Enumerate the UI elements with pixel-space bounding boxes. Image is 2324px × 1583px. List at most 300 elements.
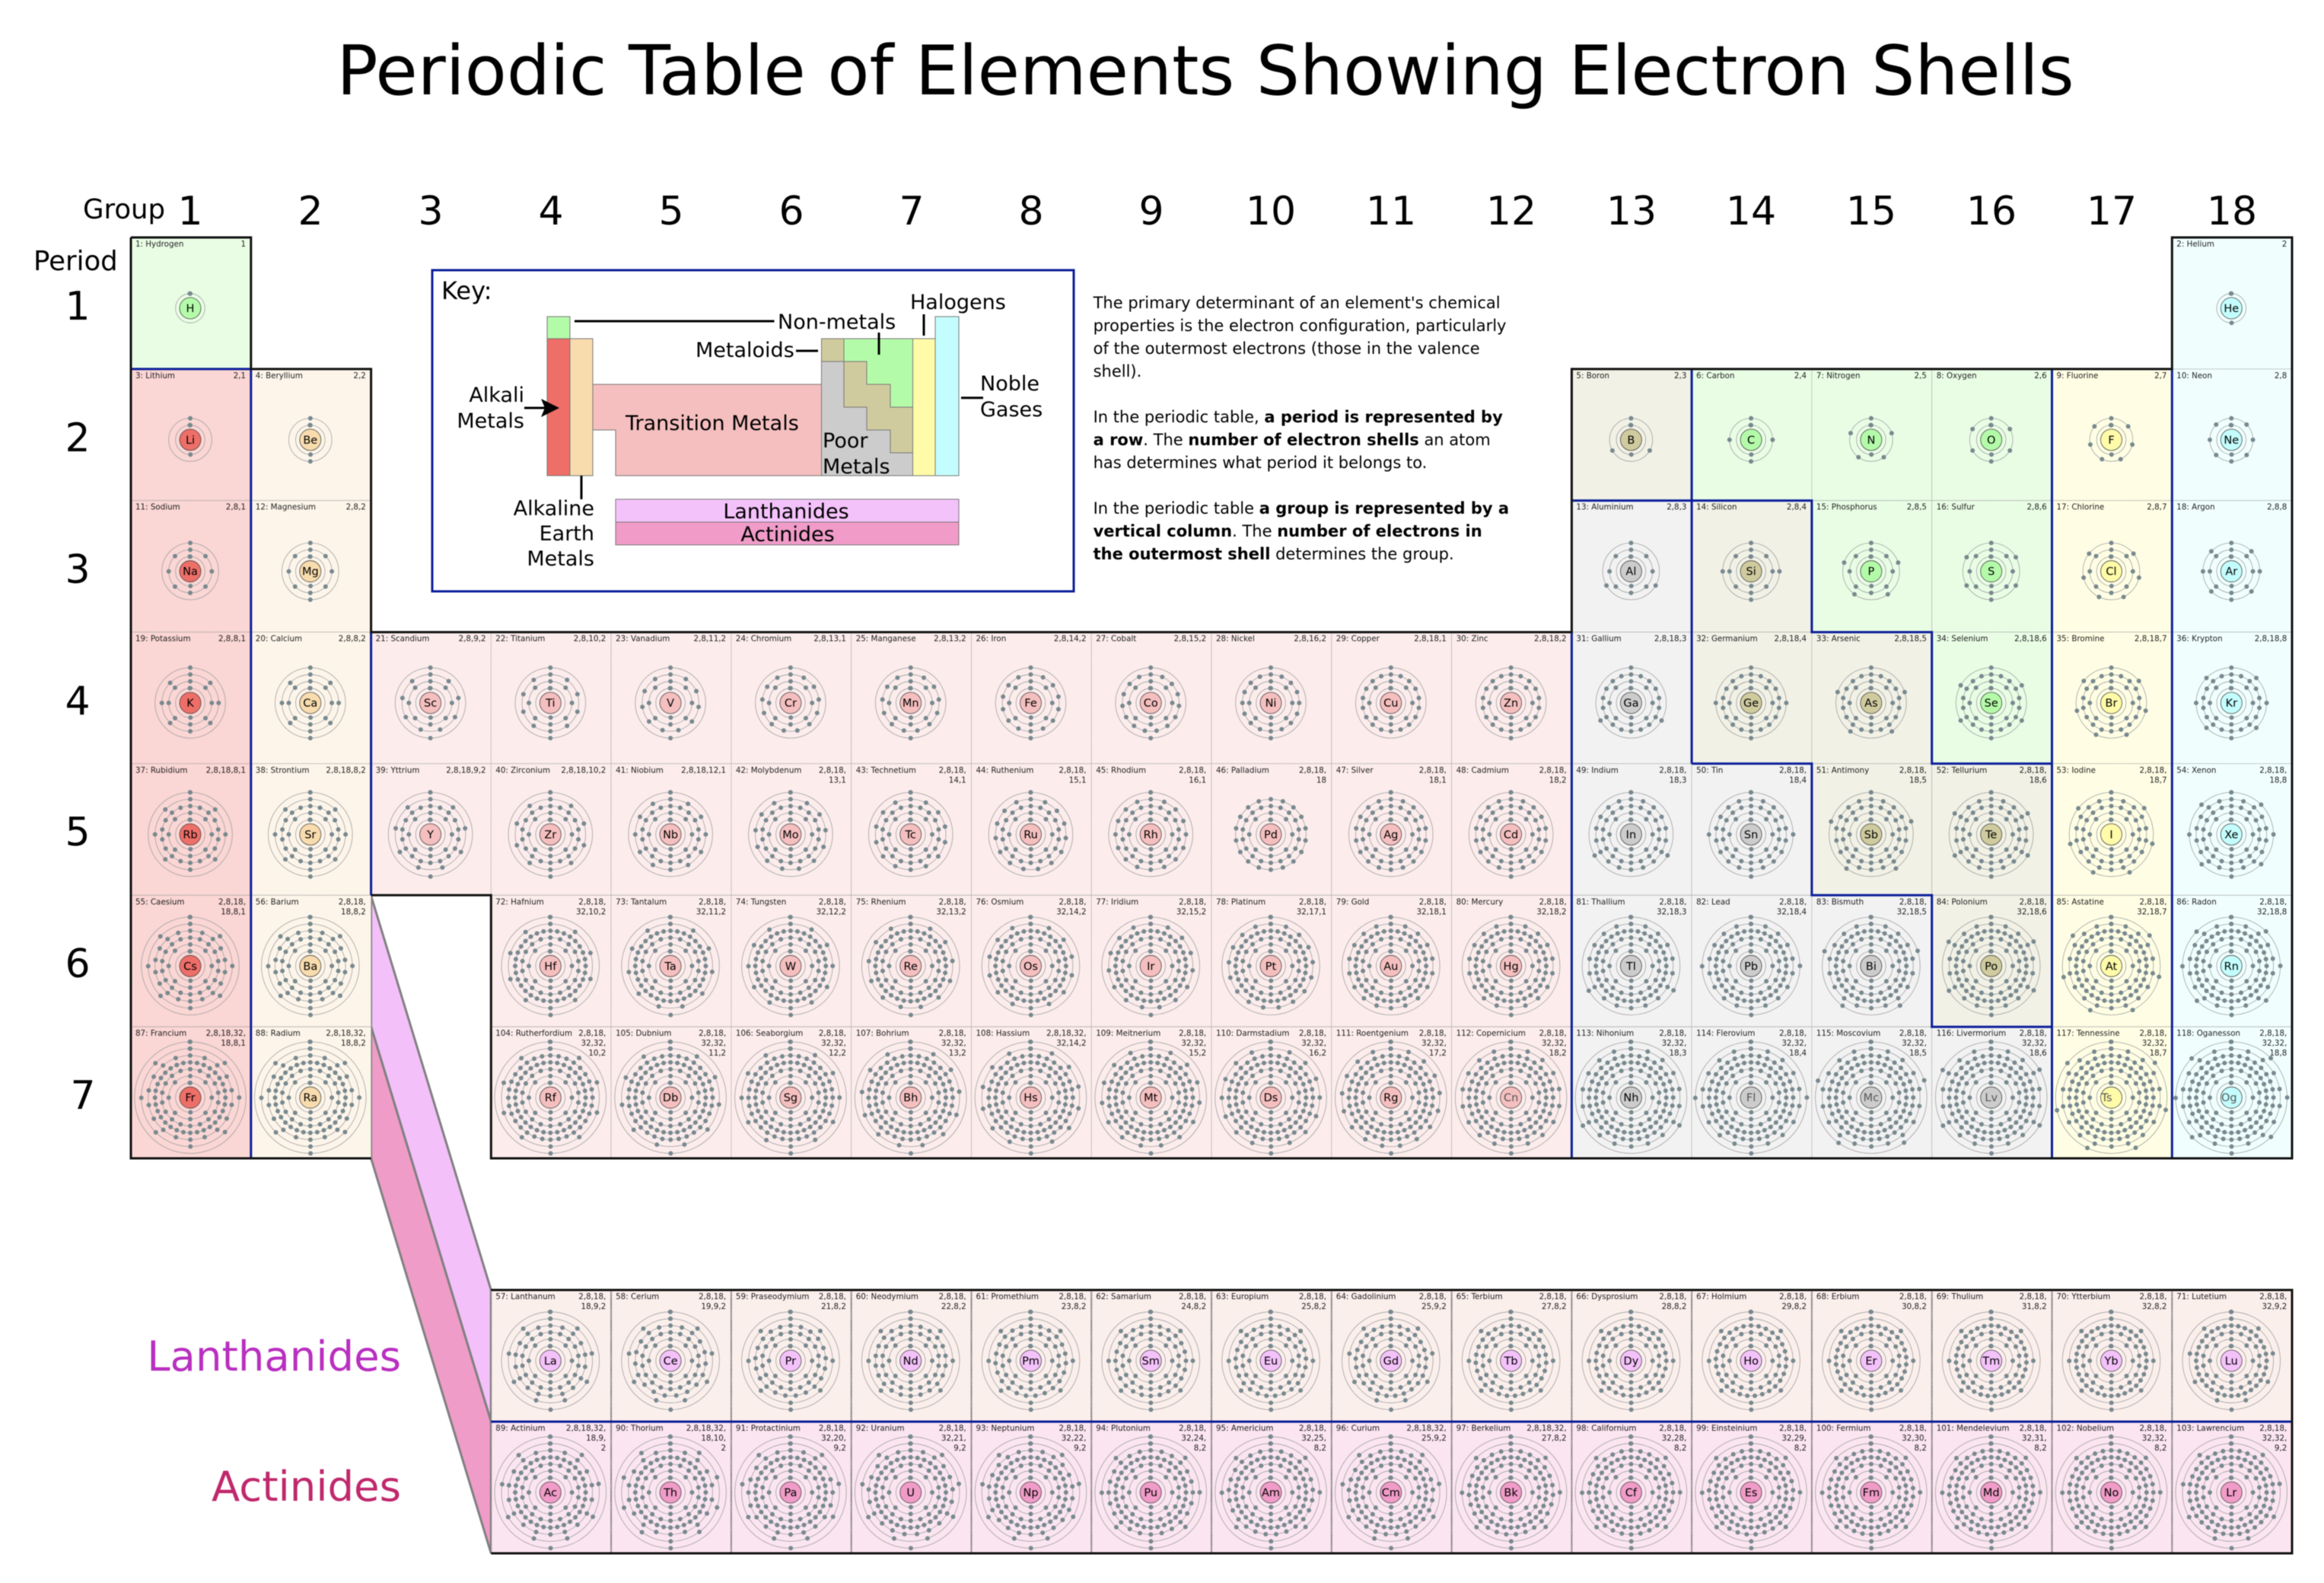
- Fermium: [1812, 1422, 1932, 1553]
- Krypton: Kr: [2226, 698, 2237, 710]
- Roentgenium: [1332, 1027, 1452, 1158]
- Sulfur: 16: Sulfur: [1937, 503, 1975, 512]
- Silver: 47: Silver: [1336, 766, 1374, 775]
- Radon: 2,8,18,: [2259, 897, 2287, 906]
- Terbium: 27,8,2: [1542, 1302, 1567, 1311]
- Samarium: 62: Samarium: [1096, 1292, 1151, 1301]
- panel: key: Key:: [441, 276, 492, 305]
- Hassium: 2,8,18,32,: [1046, 1029, 1087, 1038]
- Technetium: 14,1: [949, 776, 966, 785]
- Iridium: [1091, 895, 1211, 1027]
- Oganesson: 18,8: [2269, 1049, 2287, 1058]
- Xenon: [2172, 763, 2292, 895]
- Ruthenium: 44: Ruthenium: [976, 766, 1033, 775]
- Gallium: [1571, 632, 1692, 763]
- Lead: Pb: [1744, 960, 1758, 973]
- Radon: 86: Radon: [2176, 897, 2217, 906]
- key: labels: Lanthanides: [723, 500, 849, 524]
- Palladium: Pd: [1264, 829, 1278, 841]
- table outline: [131, 237, 2292, 1553]
- Terbium: [1452, 1290, 1571, 1422]
- Mendelevium: 8,2: [2034, 1444, 2047, 1453]
- Oganesson: [2172, 1027, 2292, 1158]
- Carbon: 2,4: [1794, 371, 1807, 381]
- Astatine: 2,8,18,: [2139, 897, 2167, 906]
- Titanium: [491, 632, 611, 763]
- key: lanthanides bar: [616, 499, 959, 522]
- Zirconium: 40: Zirconium: [495, 766, 550, 775]
- Seaborgium: Sg: [784, 1092, 797, 1104]
- Zinc: [1452, 632, 1571, 763]
- Iridium: 32,15,2: [1176, 907, 1206, 916]
- key: alkali metals: [547, 339, 570, 476]
- Carbon: C: [1747, 435, 1755, 447]
- Copper: [1332, 632, 1452, 763]
- Samarium: 24,8,2: [1181, 1302, 1206, 1311]
- group numbers: 8: [1018, 189, 1044, 234]
- Protactinium: [731, 1422, 852, 1553]
- Oganesson: 2,8,18,: [2259, 1029, 2287, 1038]
- Holmium: 29,8,2: [1781, 1302, 1807, 1311]
- Cadmium: [1452, 763, 1571, 895]
- Oxygen: 2,6: [2034, 371, 2047, 381]
- Osmium: [971, 895, 1091, 1027]
- Promethium: 23,8,2: [1062, 1302, 1087, 1311]
- Bohrium: 2,8,18,: [939, 1029, 966, 1038]
- Tungsten: W: [785, 960, 796, 973]
- Bromine: 2,8,18,7: [2135, 635, 2167, 644]
- Lutetium: Lu: [2225, 1355, 2238, 1368]
- group numbers: 7: [899, 189, 925, 234]
- Ruthenium: Ru: [1024, 829, 1038, 841]
- Nitrogen: [1812, 369, 1932, 501]
- Hafnium: 32,10,2: [576, 907, 606, 916]
- Cerium: 58: Cerium: [616, 1292, 659, 1301]
- Argon: [2172, 501, 2292, 632]
- Indium: 49: Indium: [1576, 766, 1619, 775]
- Caesium: Cs: [183, 960, 197, 973]
- Protactinium: Pa: [784, 1487, 797, 1499]
- Rhenium: Re: [904, 960, 918, 973]
- Livermorium: [1932, 1027, 2052, 1158]
- Neon: Ne: [2224, 435, 2239, 447]
- Moscovium: 18,5: [1909, 1049, 1927, 1058]
- Nobelium: [2052, 1422, 2172, 1553]
- Hassium: 108: Hassium: [976, 1029, 1030, 1038]
- Radium: 88: Radium: [256, 1029, 301, 1038]
- Darmstadium: 32,32,: [1301, 1039, 1326, 1048]
- Lawrencium: Lr: [2226, 1487, 2236, 1499]
- explanatory text: In the periodic table, a period is represented by: [1094, 408, 1503, 426]
- Rhenium: 2,8,18,: [939, 897, 966, 906]
- group numbers: 14: [1726, 189, 1776, 234]
- Roentgenium: Rg: [1383, 1092, 1398, 1104]
- key: transition metals: [593, 384, 822, 476]
- explanatory text: of the outermost electrons (those in the valence: [1094, 339, 1480, 358]
- Molybdenum: 2,8,18,: [819, 766, 846, 775]
- Niobium: 41: Niobium: [616, 766, 664, 775]
- Bohrium: [852, 1027, 971, 1158]
- Nickel: 2,8,16,2: [1294, 635, 1326, 644]
- Lutetium: 32,9,2: [2262, 1302, 2287, 1311]
- key: labels: Noble: [980, 372, 1039, 396]
- Technetium: [852, 763, 971, 895]
- Lanthanum: 18,9,2: [581, 1302, 606, 1311]
- Americium: 8,2: [1314, 1444, 1326, 1453]
- Lutetium: 71: Lutetium: [2176, 1292, 2227, 1301]
- Gold: [1332, 895, 1452, 1027]
- key: alkaline earth metals: [570, 339, 593, 476]
- Livermorium: 116: Livermorium: [1937, 1029, 2006, 1038]
- Copernicium: 18,2: [1549, 1049, 1567, 1058]
- Nitrogen: N: [1867, 435, 1875, 447]
- Indium: In: [1626, 829, 1636, 841]
- group numbers: 18: [2207, 189, 2257, 234]
- Selenium: 34: Selenium: [1937, 635, 1988, 644]
- Lawrencium: [2172, 1422, 2292, 1553]
- Promethium: [971, 1290, 1091, 1422]
- Bohrium: Bh: [903, 1092, 918, 1104]
- Yttrium: 2,8,18,9,2: [446, 766, 486, 775]
- Uranium: 9,2: [953, 1444, 966, 1453]
- Thorium: 2: [721, 1444, 726, 1453]
- Magnesium: [251, 501, 371, 632]
- Cadmium: 18,2: [1549, 776, 1567, 785]
- Dysprosium: [1571, 1290, 1692, 1422]
- Selenium: [1932, 632, 2052, 763]
- Lead: [1692, 895, 1812, 1027]
- Lawrencium: 32,32,: [2262, 1434, 2287, 1443]
- Erbium: Er: [1865, 1355, 1877, 1368]
- Tennessine: 117: Tennessine: [2056, 1029, 2120, 1038]
- key: labels: Metals: [823, 455, 890, 479]
- Xenon: Xe: [2224, 829, 2238, 841]
- Zinc: Zn: [1504, 698, 1518, 710]
- Meitnerium: [1091, 1027, 1211, 1158]
- Moscovium: [1812, 1027, 1932, 1158]
- Ytterbium: Yb: [2103, 1355, 2119, 1368]
- Iodine: [2052, 763, 2172, 895]
- Fermium: 100: Fermium: [1816, 1424, 1870, 1433]
- Gadolinium: Gd: [1383, 1355, 1399, 1368]
- Uranium: [852, 1422, 971, 1553]
- Samarium: 2,8,18,: [1179, 1292, 1206, 1301]
- Praseodymium: [731, 1290, 852, 1422]
- Polonium: [1932, 895, 2052, 1027]
- Plutonium: 2,8,18,: [1179, 1424, 1206, 1433]
- Radium: 2,8,18,32,: [326, 1029, 366, 1038]
- Platinum: 32,17,1: [1297, 907, 1326, 916]
- Astatine: At: [2106, 960, 2117, 973]
- Silver: Ag: [1383, 829, 1398, 841]
- Berkelium: 2,8,18,32,: [1527, 1424, 1567, 1433]
- lanthanides connector wedge: [371, 896, 491, 1422]
- Dubnium: 32,32,: [701, 1039, 726, 1048]
- Samarium: Sm: [1142, 1355, 1160, 1368]
- Palladium: 46: Palladium: [1216, 766, 1269, 775]
- group numbers: 11: [1366, 189, 1416, 234]
- Polonium: 32,18,6: [2017, 907, 2047, 916]
- Platinum: 2,8,18,: [1299, 897, 1326, 906]
- Francium: Fr: [185, 1092, 196, 1104]
- Berkelium: 97: Berkelium: [1456, 1424, 1511, 1433]
- Francium: [131, 1027, 251, 1158]
- Xenon: 18,8: [2269, 776, 2287, 785]
- Vanadium: V: [667, 698, 674, 710]
- category boundary lines: [131, 369, 2292, 1422]
- Caesium: 55: Caesium: [135, 897, 184, 906]
- Plutonium: Pu: [1144, 1487, 1157, 1499]
- explanatory text: vertical column. The number of electrons in: [1094, 522, 1482, 540]
- Tin: Sn: [1744, 829, 1758, 841]
- Flerovium: 114: Flerovium: [1696, 1029, 1755, 1038]
- Dysprosium: 28,8,2: [1662, 1302, 1686, 1311]
- group numbers: 10: [1246, 189, 1296, 234]
- Thallium: 2,8,18,: [1659, 897, 1686, 906]
- Dubnium: 2,8,18,: [699, 1029, 726, 1038]
- Dysprosium: Dy: [1624, 1355, 1639, 1368]
- Technetium: 43: Technetium: [856, 766, 916, 775]
- Boron: [1571, 369, 1692, 501]
- panel: key: [432, 270, 1074, 591]
- Meitnerium: 32,32,: [1181, 1039, 1206, 1048]
- Iodine: 2,8,18,: [2139, 766, 2167, 775]
- key: metalloid top: [822, 339, 844, 362]
- Mercury: 2,8,18,: [1539, 897, 1567, 906]
- Flerovium: [1692, 1027, 1812, 1158]
- Indium: 18,3: [1669, 776, 1686, 785]
- Iron: 2,8,14,2: [1054, 635, 1087, 644]
- Mendelevium: Md: [1983, 1487, 2000, 1499]
- key: alkali arrow head: [541, 399, 559, 417]
- Gold: Au: [1383, 960, 1398, 973]
- key: labels: Transition Metals: [625, 412, 799, 435]
- Americium: [1211, 1422, 1332, 1553]
- Neodymium: 60: Neodymium: [856, 1292, 918, 1301]
- Potassium: [131, 632, 251, 763]
- Fluorine: F: [2108, 435, 2115, 447]
- Lead: 82: Lead: [1696, 897, 1730, 906]
- Tennessine: 18,7: [2150, 1049, 2167, 1058]
- Lithium: Li: [186, 435, 195, 447]
- Roentgenium: 32,32,: [1421, 1039, 1447, 1048]
- Ytterbium: 2,8,18,: [2139, 1292, 2167, 1301]
- period numbers: [65, 284, 96, 1119]
- Palladium: 2,8,18,: [1299, 766, 1326, 775]
- group numbers: 16: [1966, 189, 2017, 234]
- Iridium: Ir: [1147, 960, 1154, 973]
- Hydrogen: 1: Hydrogen: [135, 240, 183, 249]
- Rhenium: 75: Rhenium: [856, 897, 906, 906]
- Antimony: 18,5: [1909, 776, 1927, 785]
- Cobalt: 27: Cobalt: [1096, 635, 1136, 644]
- Thallium: 32,18,3: [1657, 907, 1686, 916]
- Copper: 2,8,18,1: [1414, 635, 1447, 644]
- Neptunium: Np: [1023, 1487, 1039, 1499]
- Actinium: [491, 1422, 611, 1553]
- Titanium: 2,8,10,2: [574, 635, 606, 644]
- Actinium: 2: [601, 1444, 606, 1453]
- Xenon: 2,8,18,: [2259, 766, 2287, 775]
- Ruthenium: [971, 763, 1091, 895]
- Gadolinium: 64: Gadolinium: [1336, 1292, 1396, 1301]
- Cobalt: [1091, 632, 1211, 763]
- Protactinium: 32,20,: [821, 1434, 846, 1443]
- Erbium: 68: Erbium: [1816, 1292, 1859, 1301]
- Rutherfordium: 104: Rutherfordium: [495, 1029, 572, 1038]
- Ytterbium: [2052, 1290, 2172, 1422]
- Niobium: Nb: [663, 829, 678, 841]
- Roentgenium: 17,2: [1429, 1049, 1447, 1058]
- Seaborgium: 2,8,18,: [819, 1029, 846, 1038]
- Strontium: 2,8,18,8,2: [326, 766, 366, 775]
- Polonium: Po: [1985, 960, 1998, 973]
- Vanadium: 2,8,11,2: [694, 635, 726, 644]
- Moscovium: Mc: [1864, 1092, 1879, 1104]
- Plutonium: 94: Plutonium: [1096, 1424, 1151, 1433]
- Flerovium: 2,8,18,: [1779, 1029, 1807, 1038]
- Sodium: 11: Sodium: [135, 503, 180, 512]
- Radon: 32,18,8: [2257, 907, 2287, 916]
- Rutherfordium: 10,2: [588, 1049, 606, 1058]
- Livermorium: 32,32,: [2022, 1039, 2047, 1048]
- Copper: Cu: [1383, 698, 1398, 710]
- explanatory text: [1093, 294, 1509, 563]
- Thulium: [1932, 1290, 2052, 1422]
- explanatory text: a row. The number of electron shells an atom: [1094, 431, 1491, 449]
- Tantalum: [611, 895, 731, 1027]
- Vanadium: [611, 632, 731, 763]
- key: non-metals: [844, 339, 913, 407]
- Gold: 32,18,1: [1416, 907, 1447, 916]
- Copper: 29: Copper: [1336, 635, 1380, 644]
- Seaborgium: 32,32,: [821, 1039, 846, 1048]
- Uranium: U: [906, 1487, 915, 1499]
- Strontium: Sr: [304, 829, 316, 841]
- Hafnium: [491, 895, 611, 1027]
- period numbers: 3: [65, 547, 91, 593]
- period numbers: 7: [70, 1073, 96, 1119]
- key: labels: Metals: [457, 409, 524, 433]
- Tin: [1692, 763, 1812, 895]
- Bismuth: 83: Bismuth: [1816, 897, 1864, 906]
- Rhodium: [1091, 763, 1211, 895]
- Chlorine: [2052, 501, 2172, 632]
- Zirconium: Zr: [544, 829, 556, 841]
- actinides connector wedge: [371, 1027, 491, 1553]
- Tellurium: Te: [1985, 829, 1997, 841]
- Americium: Am: [1262, 1487, 1280, 1499]
- Germanium: 32: Germanium: [1696, 635, 1758, 644]
- Mendelevium: 32,31,: [2022, 1434, 2047, 1443]
- Holmium: 67: Holmium: [1696, 1292, 1746, 1301]
- Phosphorus: 15: Phosphorus: [1816, 503, 1877, 512]
- Dubnium: Db: [663, 1092, 678, 1104]
- Nihonium: 18,3: [1669, 1049, 1686, 1058]
- Californium: 98: Californium: [1576, 1424, 1636, 1433]
- Krypton: [2172, 632, 2292, 763]
- key: halogens: [913, 339, 935, 476]
- Arsenic: As: [1864, 698, 1878, 710]
- Copernicium: 112: Copernicium: [1456, 1029, 1526, 1038]
- Mendelevium: 101: Mendelevium: [1937, 1424, 2009, 1433]
- Fermium: 2,8,18,: [1899, 1424, 1927, 1433]
- Carbon: 6: Carbon: [1696, 371, 1734, 381]
- Darmstadium: 16,2: [1309, 1049, 1326, 1058]
- Thallium: Tl: [1625, 960, 1636, 973]
- Helium: 2: Helium: [2176, 240, 2214, 249]
- group numbers: 15: [1846, 189, 1896, 234]
- Meitnerium: 2,8,18,: [1179, 1029, 1206, 1038]
- Scandium: Sc: [424, 698, 437, 710]
- Nihonium: Nh: [1623, 1092, 1638, 1104]
- Phosphorus: [1812, 501, 1932, 632]
- Rubidium: 37: Rubidium: [135, 766, 187, 775]
- Ruthenium: 15,1: [1069, 776, 1087, 785]
- Manganese: 2,8,13,2: [934, 635, 966, 644]
- key: leader lines: [524, 314, 983, 499]
- lanthanides and actinides table: [491, 1290, 2292, 1553]
- key: labels: Poor: [823, 429, 868, 453]
- Chromium: 2,8,13,1: [813, 635, 846, 644]
- Seaborgium: [731, 1027, 852, 1158]
- Fermium: 8,2: [1915, 1444, 1927, 1453]
- Erbium: 2,8,18,: [1899, 1292, 1927, 1301]
- Germanium: 2,8,18,4: [1775, 635, 1807, 644]
- Astatine: [2052, 895, 2172, 1027]
- Curium: 2,8,18,32,: [1406, 1424, 1447, 1433]
- Arsenic: 33: Arsenic: [1816, 635, 1861, 644]
- Tin: 50: Tin: [1696, 766, 1723, 775]
- Bohrium: 13,2: [949, 1049, 966, 1058]
- group numbers: [177, 189, 2257, 234]
- Curium: Cm: [1382, 1487, 1400, 1499]
- Hafnium: 72: Hafnium: [495, 897, 544, 906]
- Meitnerium: 15,2: [1189, 1049, 1206, 1058]
- Dysprosium: 2,8,18,: [1659, 1292, 1686, 1301]
- Beryllium: [251, 369, 371, 501]
- Bohrium: 107: Bohrium: [856, 1029, 909, 1038]
- Scandium: 2,8,9,2: [459, 635, 486, 644]
- Dubnium: 105: Dubnium: [616, 1029, 671, 1038]
- Zinc: 30: Zinc: [1456, 635, 1488, 644]
- period numbers: 4: [65, 679, 91, 725]
- Boron: 2,3: [1674, 371, 1686, 381]
- Antimony: 2,8,18,: [1899, 766, 1927, 775]
- Silver: [1332, 763, 1452, 895]
- Copernicium: 32,32,: [1542, 1039, 1567, 1048]
- group numbers: 13: [1606, 189, 1657, 234]
- Nitrogen: 7: Nitrogen: [1816, 371, 1861, 381]
- Neodymium: 22,8,2: [941, 1302, 966, 1311]
- Molybdenum: Mo: [782, 829, 799, 841]
- Silver: 18,1: [1429, 776, 1447, 785]
- Niobium: [611, 763, 731, 895]
- Francium: 2,8,18,32,: [206, 1029, 246, 1038]
- Neptunium: 32,22,: [1062, 1434, 1087, 1443]
- Osmium: Os: [1024, 960, 1038, 973]
- Cadmium: 48: Cadmium: [1456, 766, 1509, 775]
- Livermorium: 18,6: [2030, 1049, 2047, 1058]
- Barium: 2,8,18,: [339, 897, 366, 906]
- Hassium: Hs: [1024, 1092, 1038, 1104]
- Erbium: [1812, 1290, 1932, 1422]
- Helium: 2: [2282, 240, 2287, 249]
- Tennessine: Ts: [2100, 1092, 2112, 1104]
- Tellurium: 18,6: [2030, 776, 2047, 785]
- Rutherfordium: 32,32,: [581, 1039, 606, 1048]
- Barium: 18,8,2: [341, 907, 366, 916]
